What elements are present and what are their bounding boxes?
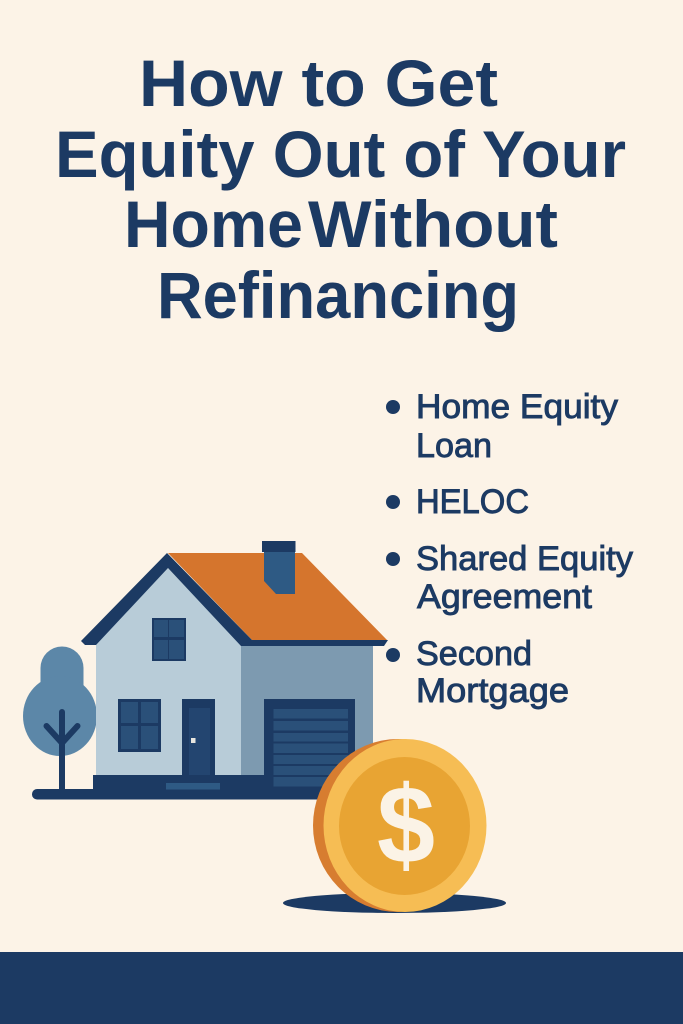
upper window [152, 618, 186, 661]
item: home equity loan: Home Equity [416, 388, 618, 426]
item: home equity loan: Loan [416, 427, 492, 465]
item: shared equity agreement: Agreement [417, 578, 593, 616]
left wall [96, 568, 242, 776]
ground bar [32, 789, 352, 800]
roof [168, 553, 387, 640]
title: Equity Out of Your [55, 117, 626, 191]
coin face [324, 739, 486, 912]
item: home equity loan [386, 388, 618, 465]
lower window [118, 699, 161, 752]
footer band [0, 952, 683, 1024]
item: shared equity agreement [386, 540, 633, 616]
right wall [241, 646, 373, 776]
garage [264, 699, 355, 790]
front step [166, 783, 220, 790]
roof trim [81, 553, 388, 646]
title [55, 46, 626, 332]
foundation [93, 775, 273, 790]
coin shadow [283, 893, 506, 913]
item: shared equity agreement: Shared Equity [416, 540, 633, 578]
icon: dollar coin [283, 739, 506, 913]
coin centre [339, 757, 470, 895]
door [182, 699, 215, 777]
icon: tree [23, 646, 97, 790]
title: Without [308, 187, 558, 261]
chimney [262, 541, 296, 594]
item: second mortgage: Mortgage [416, 672, 569, 710]
title: Refinancing [157, 258, 519, 332]
coin edge [313, 739, 483, 912]
dollar sign: $ [377, 764, 435, 887]
icon: house [32, 541, 388, 800]
item: second mortgage [386, 635, 569, 710]
item: second mortgage: Second [416, 635, 532, 673]
title: How to Get [139, 46, 498, 120]
item: HELOC: HELOC [416, 483, 529, 521]
bullet list [386, 388, 633, 710]
title: Home [124, 187, 303, 261]
